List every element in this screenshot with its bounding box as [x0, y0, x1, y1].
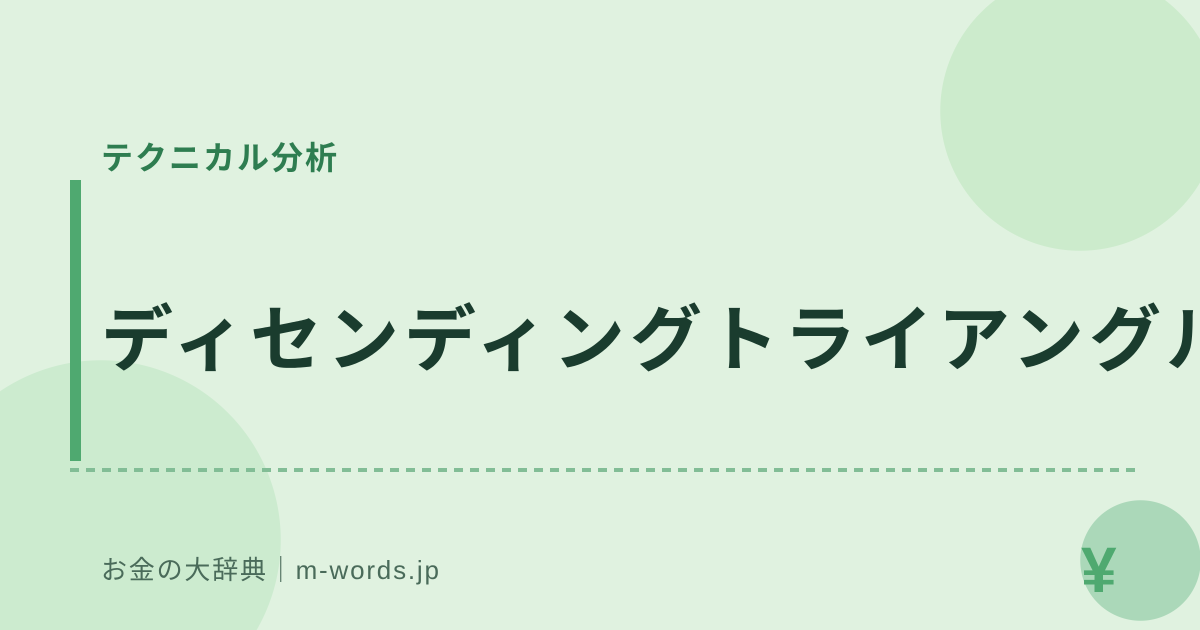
category label: テクニカル分析 — [101, 140, 339, 176]
footer site name: お金の大辞典｜m-words.jp — [101, 555, 441, 585]
decorative circle: bottom left — [0, 360, 281, 630]
dashed divider — [70, 468, 1136, 472]
icon: yen symbol: ¥ — [1081, 534, 1117, 606]
decorative circle: top right — [940, 0, 1200, 251]
decorative circle: bottom right — [1080, 500, 1200, 621]
accent bar — [70, 180, 81, 461]
